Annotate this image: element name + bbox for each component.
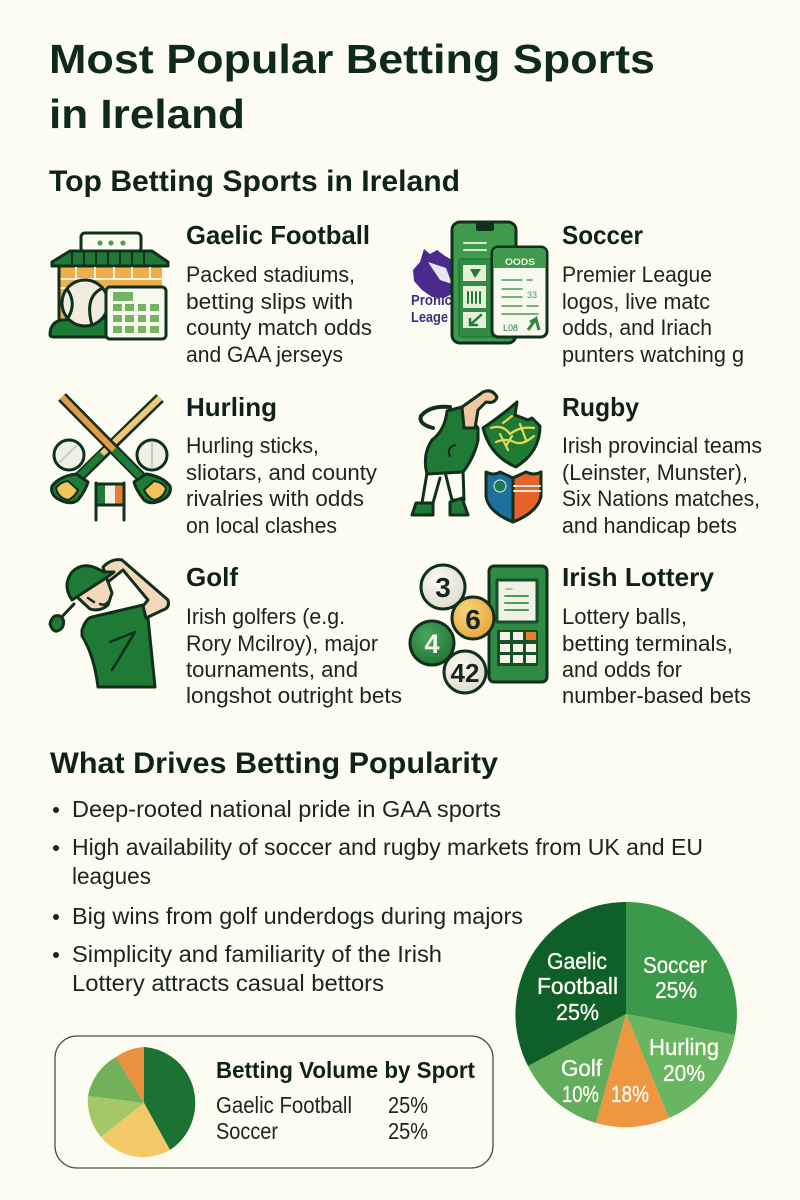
icon: stadium and betting slip	[50, 233, 168, 339]
icon: premier league logo and odds phones: Leage	[411, 310, 448, 326]
legend rows: 25%	[388, 1092, 428, 1118]
chart: large pie of betting share: 25%	[655, 977, 697, 1003]
bullet list: popularity drivers: Deep-rooted national pride in GAA sports	[72, 796, 501, 822]
icon: lottery balls and betting terminal: 4	[424, 629, 440, 659]
text: gaelic football description	[186, 262, 372, 367]
icon: rugby player and provincial shields	[412, 391, 541, 522]
heading: gaelic football: Gaelic Football	[186, 220, 370, 250]
icon: crossed hurls, sliotars and flag	[52, 397, 170, 520]
icon: premier league logo and odds phones: Pronic	[411, 293, 452, 309]
chart: large pie of betting share: Gaelic	[547, 948, 607, 974]
text: golf description	[186, 604, 402, 708]
title: in Ireland	[49, 91, 245, 137]
text: soccer description: punters watching g	[562, 342, 744, 367]
text: irish lottery description: number-based bets	[562, 683, 751, 708]
legend rows: Gaelic Football	[216, 1092, 352, 1118]
chart: large pie of betting share: 18%	[611, 1081, 649, 1107]
legend heading: Betting Volume by Sport	[216, 1057, 475, 1083]
text: rugby description: Six Nations matches,	[562, 486, 760, 511]
text: rugby description	[562, 433, 762, 538]
chart: large pie of betting share: 25%	[556, 999, 599, 1025]
icon: premier league logo and odds phones: L08	[503, 323, 518, 333]
heading: top betting sports: Top Betting Sports in Ireland	[49, 165, 460, 198]
panel: gaelic football	[50, 220, 372, 367]
text: soccer description	[562, 262, 744, 367]
legend rows: 25%	[388, 1118, 428, 1144]
chart: small pie	[88, 1047, 195, 1157]
chart: large pie of betting share	[515, 902, 737, 1127]
bullet list: popularity drivers	[53, 796, 703, 996]
title: Most Popular Betting Sports	[49, 36, 655, 82]
text: soccer description: odds, and Iriach	[562, 315, 712, 340]
chart: large pie of betting share: Football	[537, 973, 618, 999]
chart: large pie of betting share: Golf	[561, 1055, 603, 1081]
heading: hurling: Hurling	[186, 392, 277, 422]
panel: hurling	[52, 392, 377, 538]
bullet list: popularity drivers: Big wins from golf underdogs during majors	[72, 903, 523, 929]
text: gaelic football description: and GAA jerseys	[186, 342, 343, 367]
chart: large pie of betting share: Soccer	[643, 952, 707, 978]
text: rugby description: Irish provincial teams	[562, 433, 762, 458]
icon: golfer mid-swing	[50, 560, 168, 687]
text: gaelic football description: county match odds	[186, 315, 372, 340]
chart: large pie of betting share: 10%	[562, 1081, 599, 1107]
heading: golf: Golf	[186, 562, 238, 592]
bullet list: popularity drivers: Lottery attracts casual bettors	[72, 970, 384, 996]
text: golf description: Irish golfers (e.g.	[186, 604, 345, 629]
text: rugby description: (Leinster, Munster),	[562, 460, 748, 485]
text: soccer description: logos, live matc	[562, 289, 710, 314]
icon: lottery balls and betting terminal: 3	[435, 572, 451, 603]
heading: rugby: Rugby	[562, 392, 640, 422]
panel: soccer	[411, 220, 744, 367]
heading: irish lottery: Irish Lottery	[562, 562, 715, 592]
icon: lottery balls and betting terminal: 42	[451, 658, 479, 688]
bullet list: popularity drivers: High availability of soccer and rugby markets from UK and EU	[72, 834, 703, 860]
text: hurling description: sliotars, and county	[186, 460, 377, 485]
panel: rugby	[412, 391, 762, 538]
panel: irish lottery	[410, 562, 751, 708]
chart: large pie of betting share: Hurling	[649, 1034, 719, 1060]
text: golf description: longshot outright bets	[186, 683, 402, 708]
text: irish lottery description: Lottery balls,	[562, 604, 687, 629]
text: hurling description: rivalries with odds	[186, 486, 364, 511]
title	[49, 36, 655, 137]
text: rugby description: and handicap bets	[562, 513, 737, 538]
chart: large pie of betting share: 20%	[663, 1060, 705, 1086]
heading: soccer: Soccer	[562, 220, 643, 250]
panel: betting volume by sport	[55, 1036, 493, 1168]
text: golf description: tournaments, and	[186, 657, 358, 682]
bullet list: popularity drivers: leagues	[72, 863, 151, 889]
text: hurling description	[186, 433, 377, 538]
bullet list: popularity drivers: Simplicity and familiarity of the Irish	[72, 941, 442, 967]
text: gaelic football description: betting slips with	[186, 289, 353, 314]
text: hurling description: on local clashes	[186, 513, 337, 538]
legend rows: Soccer	[216, 1118, 278, 1144]
text: gaelic football description: Packed stadiums,	[186, 262, 355, 287]
icon: premier league logo and odds phones	[411, 222, 547, 343]
text: irish lottery description	[562, 604, 751, 708]
panel: golf	[50, 560, 402, 708]
text: irish lottery description: betting terminals,	[562, 631, 733, 656]
heading: what drives betting popularity: What Drives Betting Popularity	[50, 747, 498, 780]
legend rows	[216, 1092, 428, 1144]
icon: premier league logo and odds phones: 33	[527, 290, 537, 300]
icon: lottery balls and betting terminal	[410, 565, 547, 693]
text: golf description: Rory Mcilroy), major	[186, 631, 378, 656]
icon: premier league logo and odds phones: OODS	[505, 257, 535, 268]
text: irish lottery description: and odds for	[562, 657, 682, 682]
text: hurling description: Hurling sticks,	[186, 433, 319, 458]
icon: lottery balls and betting terminal: 6	[465, 604, 481, 635]
text: soccer description: Premier League	[562, 262, 712, 287]
